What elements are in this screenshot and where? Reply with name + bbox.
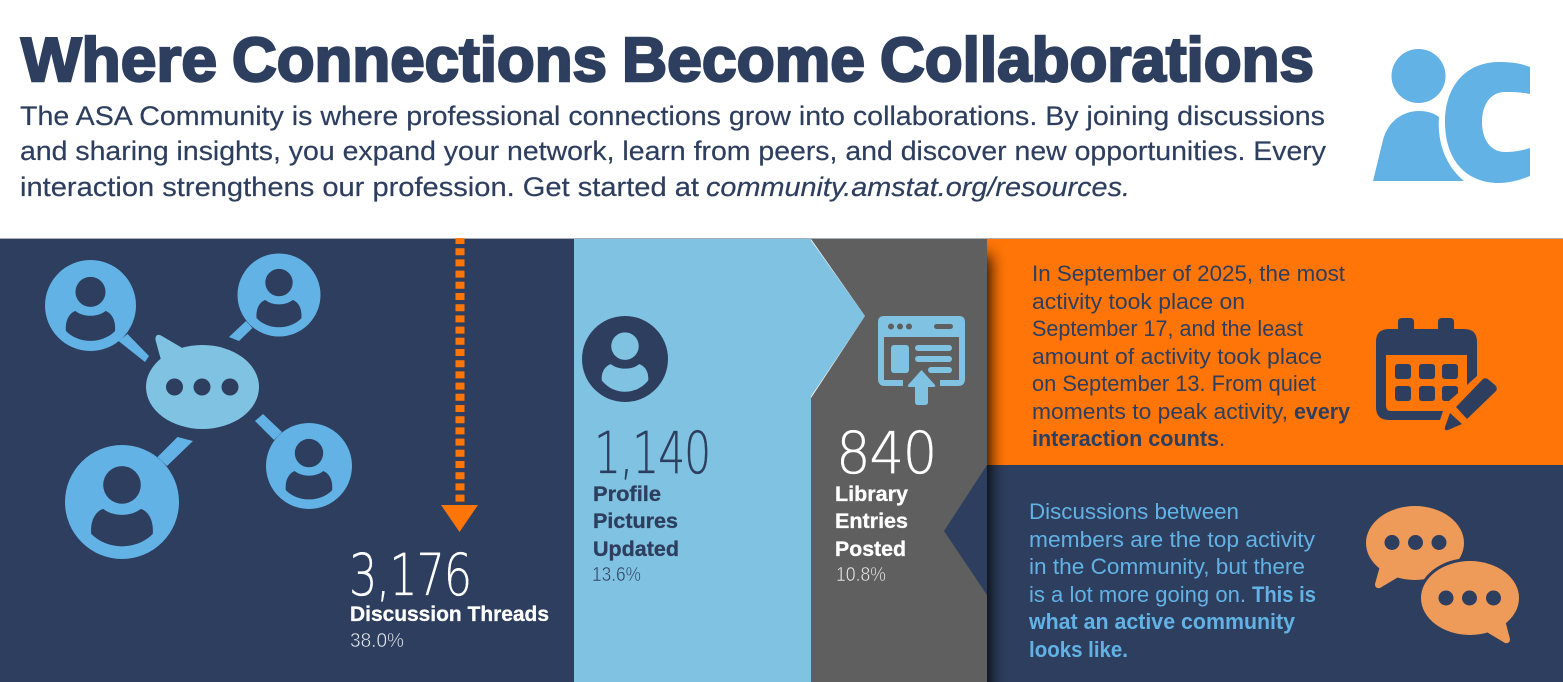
text: top activity note: is a lot more going on. — [1029, 582, 1246, 607]
stat: 1,140 profile pictures: 1,140 — [594, 419, 710, 487]
stat: 840 library entries: 10.8% — [836, 563, 886, 586]
icon: two chat bubbles — [1366, 506, 1522, 643]
title: Connections — [232, 26, 607, 95]
stat: 1,140 profile pictures: Updated — [593, 537, 679, 561]
text: activity note — [1032, 261, 1351, 451]
text: activity note: amount of activity took place — [1032, 344, 1322, 369]
panel: September activity — [987, 239, 1563, 465]
intro paragraph — [20, 101, 1327, 202]
text: activity note: activity took place on — [1032, 289, 1245, 314]
text: top activity note: looks like. — [1029, 637, 1128, 662]
intro paragraph: community.amstat.org/resources. — [706, 172, 1130, 202]
text: activity note: . — [1219, 426, 1225, 451]
text: top activity note — [1028, 499, 1316, 662]
text: activity note: on September 13. From quiet — [1032, 371, 1316, 396]
stat: 3,176 discussion threads: Discussion Threads — [350, 602, 549, 626]
stat: 1,140 profile pictures: Pictures — [593, 509, 678, 533]
text: activity note: moments to peak activity, — [1032, 399, 1288, 424]
icon: connected community network — [45, 254, 352, 559]
panel: community note — [987, 465, 1563, 682]
text: top activity note: This is — [1252, 582, 1316, 607]
stat: 1,140 profile pictures: Profile — [593, 482, 661, 506]
panel: profile pictures — [574, 239, 865, 682]
intro paragraph: interaction strengthens our profession. Get started at — [20, 172, 700, 202]
title: Become — [622, 26, 865, 95]
text: activity note: In September of 2025, the most — [1032, 261, 1345, 286]
intro paragraph: and sharing insights, you expand your network, learn from peers, and discover new opportunities. Every — [20, 136, 1327, 166]
text: top activity note: what an active community — [1028, 609, 1296, 634]
stat: 840 library entries — [835, 419, 936, 586]
stat: 3,176 discussion threads — [349, 541, 549, 652]
stat: 840 library entries: Posted — [835, 537, 906, 561]
icon: community logo — [1373, 49, 1530, 183]
text: top activity note: members are the top activity — [1029, 527, 1315, 552]
icon: profile avatar — [582, 316, 668, 402]
intro paragraph: The ASA Community is where professional connections grow into collaborations. By joining discussions — [20, 101, 1325, 131]
text: activity note: interaction counts — [1032, 426, 1219, 451]
stat: 840 library entries: Entries — [835, 509, 908, 533]
text: activity note: every — [1294, 399, 1351, 424]
chevron — [810, 239, 865, 398]
title: Where — [21, 26, 217, 95]
text: top activity note: Discussions between — [1029, 499, 1239, 524]
stat: 1,140 profile pictures: 13.6% — [592, 563, 641, 586]
panel: discussion threads — [0, 238, 574, 682]
top rule — [0, 238, 1563, 239]
navy pointer — [944, 465, 987, 595]
icon: calendar with pencil — [1376, 318, 1497, 430]
title — [21, 26, 1314, 95]
title: Collaborations — [880, 26, 1314, 95]
icon: library upload window — [878, 316, 965, 405]
stat: 1,140 profile pictures — [592, 419, 710, 586]
stat: 840 library entries: Library — [835, 482, 908, 506]
text: activity note: September 17, and the least — [1032, 316, 1303, 341]
stat: 3,176 discussion threads: 38.0% — [350, 629, 404, 652]
arrow: dashed orange down arrow — [441, 238, 478, 532]
panel: library entries — [811, 239, 987, 682]
text: top activity note: in the Community, but there — [1029, 554, 1305, 579]
stat: 3,176 discussion threads: 3,176 — [349, 541, 471, 609]
stat: 840 library entries: 840 — [836, 419, 936, 487]
